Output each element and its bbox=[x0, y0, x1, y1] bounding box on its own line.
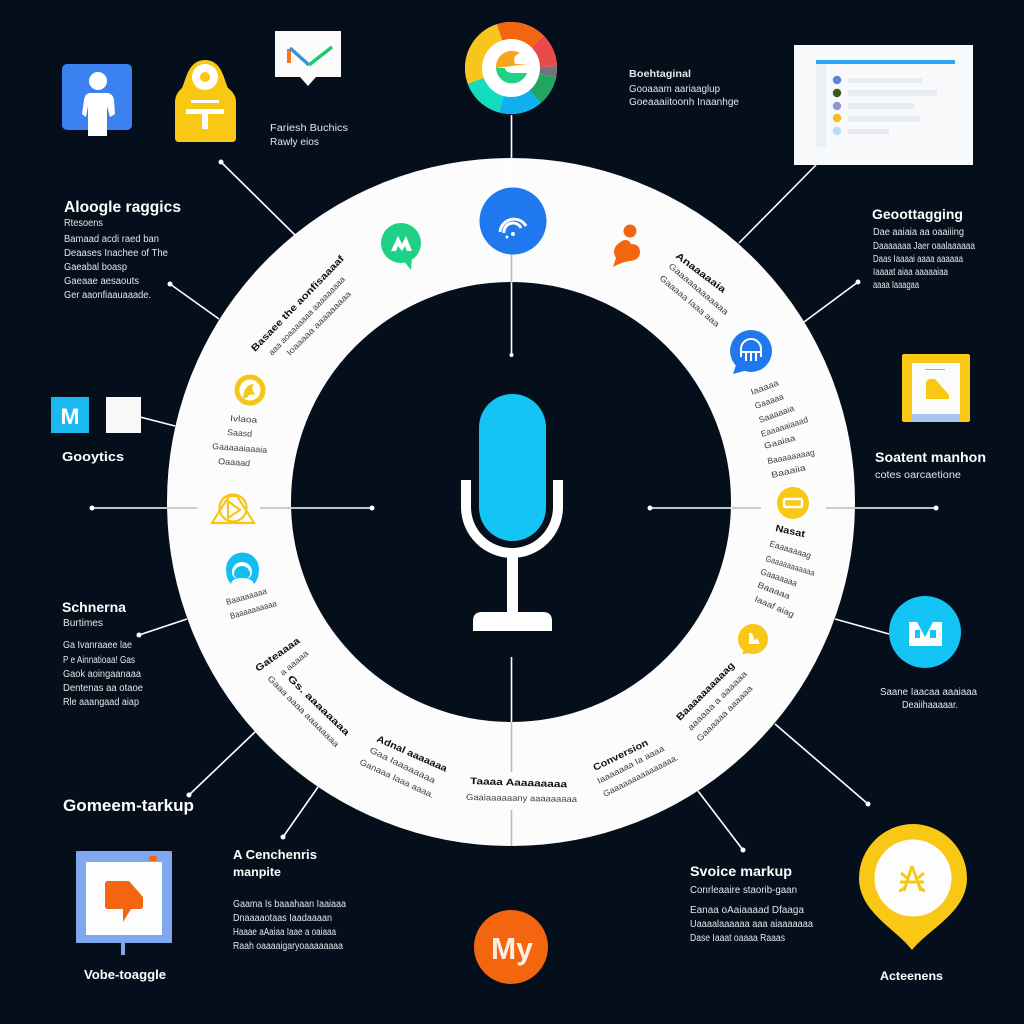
text block: a contents: Haaae aAaiaa Iaae a oaiaaa bbox=[233, 927, 336, 938]
icon: orange My circle bbox=[474, 910, 548, 984]
ring text: right lower: Nasat bbox=[774, 523, 807, 540]
text: facets caption bbox=[270, 123, 348, 148]
text block: geotagging bbox=[872, 206, 975, 291]
ring text: bottom left: Adnal aaaaaaa bbox=[375, 734, 449, 775]
ring text: right upper: Baaaiia bbox=[770, 462, 807, 480]
icon: orange person chat bbox=[613, 224, 640, 267]
text block: left heading: Bamaad acdi raed ban bbox=[64, 234, 159, 245]
ring text: upper right: Gaaaaa Iaaa aaa bbox=[658, 273, 722, 329]
icon: cyan headset bbox=[226, 552, 259, 584]
text block: schema: Dentenas aa otaoe bbox=[63, 683, 143, 694]
text block: schema: Gaok aoingaanaaa bbox=[63, 669, 141, 680]
ring text: lower left: Gateaaaa bbox=[253, 635, 303, 674]
ring text: left bbox=[212, 413, 268, 468]
ring text: upper right: Gaaaaaaaaaaaa bbox=[667, 261, 731, 317]
icon: mail speech bubble bbox=[275, 31, 341, 86]
ring text: conversion bbox=[591, 737, 680, 799]
text block: voice markup: Uaaaalaaaaaa aaa aiaaaaaaa bbox=[690, 919, 813, 930]
icon: cyan circle badge bbox=[889, 596, 961, 668]
text block: content: Soatent manhon bbox=[875, 449, 986, 465]
ring text: upper right: Anaaaaaia bbox=[673, 251, 728, 296]
text block: left heading: Gaeaae aesaouts bbox=[64, 276, 139, 287]
icon: yellow map pin bbox=[859, 824, 967, 950]
text block: voice markup: Conrleaaire staorib-gaan bbox=[690, 885, 797, 896]
text block: schema: Rle aaangaad aiap bbox=[63, 697, 139, 708]
connector lines bbox=[90, 115, 938, 852]
ring text: right lower: Eaaaaaaag bbox=[768, 538, 813, 561]
ring text: upper left bbox=[249, 253, 353, 357]
central ring bbox=[229, 220, 793, 784]
ring text: lower left small bbox=[225, 586, 278, 621]
text block: left heading bbox=[64, 199, 181, 301]
ring text: right upper bbox=[749, 377, 816, 480]
text block: voice markup: Dase Iaaat oaaaa Raaas bbox=[690, 933, 785, 944]
ring text: lower left: a aaaaa bbox=[278, 648, 311, 678]
icon: blue chat bbox=[730, 330, 772, 374]
icon: yellow chat bbox=[738, 624, 768, 654]
text block: schema: P e Ainnatioaa! Gas bbox=[63, 655, 135, 666]
text: facets caption: Rawly eios bbox=[270, 137, 319, 148]
ring text: conversion: Iaaaaaaa Ia aaaa bbox=[595, 743, 666, 786]
ring text: right lower: Gaaaaaaaaaaa bbox=[764, 553, 816, 578]
text block: voice markup bbox=[690, 863, 813, 944]
ring text: right lower: Gaaaaaaa bbox=[759, 566, 799, 588]
ring text: left: Ivlaoa bbox=[230, 413, 258, 425]
ring text: right lower: Baaaaa bbox=[756, 580, 792, 601]
icon: blue person tile bbox=[62, 64, 132, 136]
ring text: lower right: Baaaaaaaaaag bbox=[674, 660, 737, 723]
ring text: upper left: Ioaaaaa aaaaaaaaa bbox=[284, 289, 353, 357]
ring text: lower left: Gs. aaaaaaaa bbox=[285, 673, 352, 739]
text block: a contents: Gaama Is baaahaan Iaaiaaa bbox=[233, 899, 346, 910]
ring text: right lower bbox=[753, 523, 816, 619]
text: Gooytics label: Gooytics bbox=[62, 449, 124, 464]
text block: geotagging: Iaaaat aiaa aaaaaiaa bbox=[873, 267, 948, 278]
icon: cyan M tile and white square: M bbox=[60, 404, 80, 429]
text: top right caption: Boehtaginal bbox=[629, 69, 691, 80]
ring text: lower right: Gaaaaaa aaaaaa bbox=[694, 683, 755, 743]
icon: cyan M tile and white square bbox=[51, 397, 141, 433]
text block: geotagging: Geoottagging bbox=[872, 206, 963, 222]
text block: schema: Schnerna bbox=[62, 599, 126, 615]
ring text: bottom centre: Taaaa Aaaaaaaaa bbox=[470, 776, 568, 790]
ring text: conversion: Conversion bbox=[591, 737, 650, 774]
icon: blue framed chat sign bbox=[76, 851, 172, 955]
text block: left heading: Ger aaonfiaauaaade. bbox=[64, 290, 151, 301]
icon: yellow tag bbox=[175, 60, 236, 142]
ring text: left: Oaaaad bbox=[218, 456, 251, 468]
text: facets caption: Fariesh Buchics bbox=[270, 123, 348, 134]
ring text: bottom centre bbox=[466, 776, 577, 804]
icon: central microphone bbox=[466, 394, 558, 631]
text block: geotagging: Daaaaaaa Jaer oaalaaaaaa bbox=[873, 241, 975, 252]
ring text: upper left: aaa aoaaaaaaa aaaaaaaaa bbox=[266, 274, 347, 357]
ring text: bottom centre: Gaaiaaaaaany aaaaaaaaa bbox=[466, 792, 577, 804]
text block: a contents: Raah oaaaaigaryoaaaaaaaa bbox=[233, 941, 343, 952]
icon: blue wifi circle bbox=[480, 188, 546, 254]
text: pin caption: Acteenens bbox=[880, 969, 943, 983]
ring text: upper right bbox=[658, 251, 731, 329]
ring text: lower left bbox=[253, 635, 352, 749]
ring text: left: Gaaaaaiaaaia bbox=[212, 441, 268, 455]
ring text: lower right: aaaaaa a aaaaaa bbox=[685, 669, 749, 732]
panel: dashboard card bbox=[794, 45, 973, 165]
text: badge caption: Deaiihaaaaar. bbox=[902, 700, 958, 711]
text: top right caption bbox=[629, 69, 739, 108]
text block: content bbox=[875, 449, 986, 481]
text block: left heading: Rtesoens bbox=[64, 218, 103, 229]
icon: green chat bbox=[381, 223, 421, 270]
text block: voice markup: Eanaa oAaiaaaad Dfaaga bbox=[690, 905, 804, 916]
text block: left heading: Gaeabal boasp bbox=[64, 262, 127, 273]
ring text: upper left: Basaee the aonfisaaaaf bbox=[249, 253, 347, 354]
icon: yellow document bbox=[902, 354, 970, 422]
text: top right caption: Goeaaaiitoonh Inaanhge bbox=[629, 97, 739, 108]
ring text: lower left small: Baaaaaaaaaa bbox=[229, 598, 278, 621]
icon: yellow swirl ring bbox=[237, 377, 263, 403]
ring text: bottom left bbox=[358, 734, 449, 800]
icon: colourful G ring bbox=[465, 22, 557, 114]
ring text: lower left: Gaaa aaaa aaaaaaaa bbox=[266, 673, 341, 749]
text block: schema bbox=[62, 599, 143, 708]
text block: a contents: Dnaaaaotaas Iaadaaaan bbox=[233, 913, 332, 924]
text block: a contents: A Cenchenris bbox=[233, 847, 317, 862]
ring text: right upper: Iaaaaa bbox=[749, 377, 780, 397]
text block: geotagging: aaaa Iaaagaa bbox=[873, 280, 919, 291]
ring text: bottom left: Ganaaa Iaaa aaaa. bbox=[358, 757, 436, 800]
icon: yellow button bbox=[777, 487, 809, 519]
ring text: right upper: Gaaiaa bbox=[763, 432, 797, 451]
ring text: bottom left: Gaa Iaaaaaaaa bbox=[368, 745, 438, 786]
text block: voice markup: Svoice markup bbox=[690, 863, 792, 879]
ring text: lower left small: Baaaaaaaa bbox=[225, 586, 268, 607]
ring text: right upper: Baaaaaaaag bbox=[766, 447, 816, 466]
text: badge caption bbox=[880, 687, 977, 711]
text block: left heading: Aloogle raggics bbox=[64, 199, 181, 216]
ring text: right upper: Eaaaaaiaaad bbox=[760, 414, 809, 439]
ring text: conversion: Gaaaaaaaaaaaaaaa. bbox=[601, 752, 680, 799]
text block: a contents bbox=[233, 847, 346, 952]
text: top right caption: Gooaaam aariaaglup bbox=[629, 84, 720, 95]
ring text: left: Saasd bbox=[227, 427, 253, 439]
ring text: right lower: Iaaaf aiag bbox=[753, 594, 796, 619]
ring text: right upper: Saaaaaia bbox=[757, 403, 796, 425]
text block: content: cotes oarcaetione bbox=[875, 470, 961, 481]
text block: geotagging: Dae aaiaia aa oaaiiing bbox=[873, 227, 964, 238]
icon: yellow triangle play bbox=[212, 494, 254, 523]
ring text: lower right bbox=[674, 660, 755, 743]
text block: schema: Burtimes bbox=[63, 618, 103, 629]
text: badge caption: Saane Iaacaa aaaiaaa bbox=[880, 687, 977, 698]
text block: schema: Ga Ivanraaee lae bbox=[63, 640, 132, 651]
ring text: right upper: Gaaaaa bbox=[753, 391, 785, 411]
heading: gomeem-tarkup: Gomeem-tarkup bbox=[63, 796, 194, 815]
text: voice toggle label: Vobe-toaggle bbox=[84, 967, 166, 982]
icon: orange My circle: My bbox=[491, 931, 534, 966]
text block: geotagging: Daas Iaaaai aaaa aaaaaa bbox=[873, 254, 963, 265]
text block: a contents: manpite bbox=[233, 865, 281, 879]
text block: left heading: Deaases Inachee of The bbox=[64, 248, 168, 259]
